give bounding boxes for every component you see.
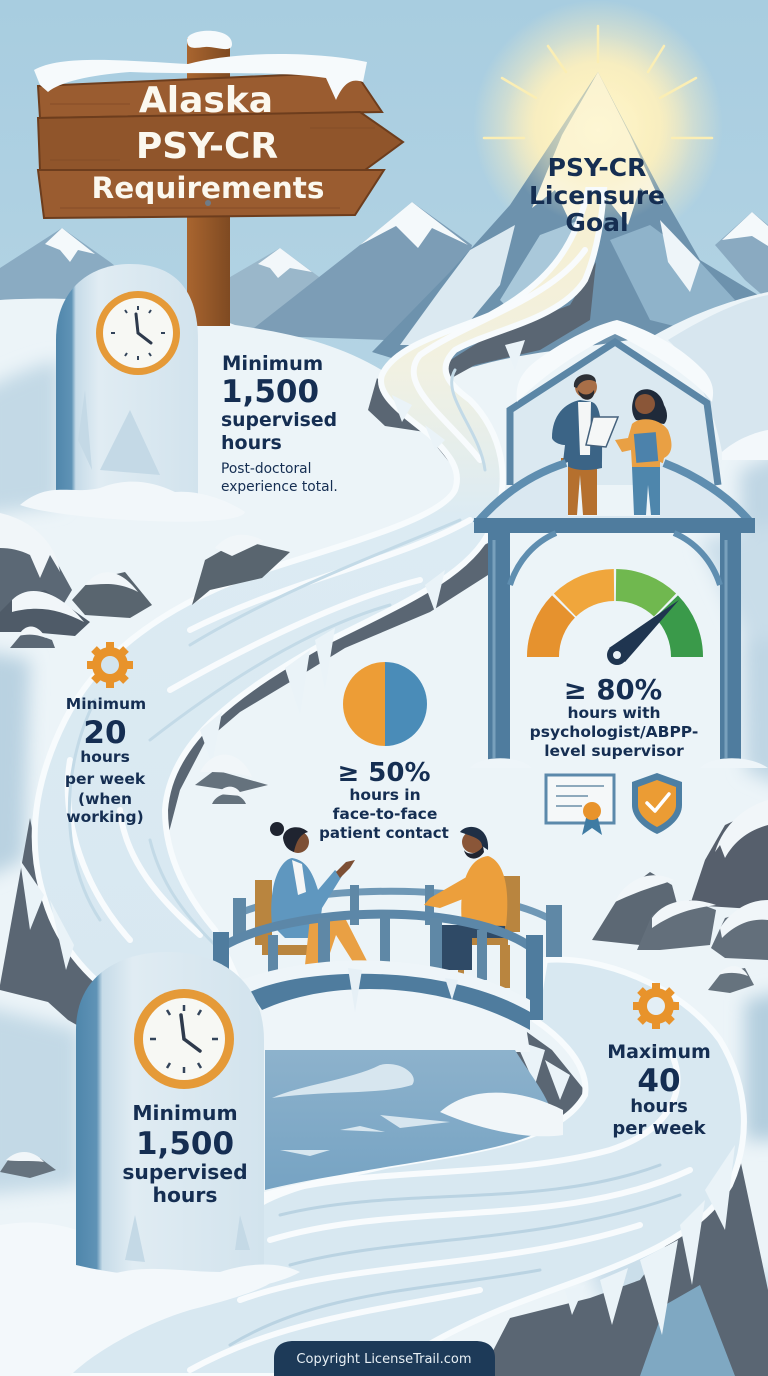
text: 80 percent: level supervisor bbox=[544, 742, 684, 760]
snow under bridge bbox=[262, 975, 530, 1052]
gauge amber segment bbox=[565, 585, 614, 605]
gauge bbox=[543, 585, 687, 657]
text: minimum 20 hours: working) bbox=[66, 808, 144, 826]
text: minimum 20 hours: (when bbox=[78, 790, 132, 808]
text: 50 percent: hours in bbox=[349, 786, 421, 804]
icy river upper bbox=[35, 190, 604, 1005]
text: minimum 20 hours: Minimum bbox=[66, 695, 146, 713]
icy river lower bbox=[60, 959, 744, 1376]
wooden sign board bbox=[38, 72, 403, 218]
person: colleague with folder bbox=[615, 389, 671, 515]
boulders left bbox=[0, 513, 290, 1178]
icon: sun rays bbox=[484, 26, 712, 138]
snow bank bottom left bbox=[0, 1222, 275, 1376]
milestone stone: top bbox=[20, 264, 245, 522]
snow roof bbox=[517, 320, 713, 402]
text: minimum 20 hours bbox=[65, 695, 146, 826]
text: minimum 1500 hours bottom: Minimum bbox=[132, 1101, 238, 1125]
text: 80 percent: ≥ 80% bbox=[564, 674, 662, 706]
back railing bbox=[235, 891, 552, 920]
text: maximum 40 hours: hours bbox=[630, 1096, 688, 1117]
icicles bbox=[20, 340, 735, 1335]
arch dome bbox=[510, 342, 718, 485]
text: minimum 20 hours: per week bbox=[65, 770, 146, 788]
gauge orange segment bbox=[543, 606, 564, 657]
text: minimum 1500 hours top: experience total. bbox=[221, 479, 338, 495]
snow on sign bbox=[34, 54, 367, 100]
text: 50 percent: ≥ 50% bbox=[337, 758, 431, 788]
text: 80 percent: psychologist/ABPP- bbox=[530, 723, 698, 741]
icon: gauge needle bbox=[607, 600, 679, 665]
goal label: Goal bbox=[565, 208, 629, 237]
goal label: Licensure bbox=[529, 181, 665, 210]
bridge deck arch bbox=[250, 974, 530, 1030]
text: 80 percent: hours with bbox=[567, 704, 661, 722]
bridge with two people bbox=[213, 822, 562, 1030]
rock inner blue ice bbox=[640, 1285, 735, 1376]
support posts bbox=[488, 533, 741, 760]
heading bbox=[92, 80, 324, 205]
text: minimum 1500 hours top: hours bbox=[221, 432, 282, 454]
text: minimum 1500 hours top: supervised bbox=[221, 410, 337, 431]
snowy balcony bbox=[480, 462, 750, 522]
text: 50 percent bbox=[319, 758, 449, 842]
text: maximum 40 hours bbox=[607, 1041, 711, 1139]
icon: certificate bbox=[546, 775, 614, 835]
signpost bbox=[34, 31, 403, 326]
heading: Alaska bbox=[139, 80, 273, 121]
icon: clock bbox=[96, 291, 180, 375]
heading: Requirements bbox=[92, 171, 324, 205]
arch shelter bbox=[470, 320, 768, 768]
person: seated man bbox=[424, 827, 520, 988]
bridge front railing bbox=[220, 914, 535, 950]
footer copyright pill: Copyright LicenseTrail.com bbox=[296, 1352, 472, 1367]
heading: PSY-CR bbox=[136, 126, 278, 167]
text: maximum 40 hours: Maximum bbox=[607, 1041, 711, 1063]
icon: shield check bbox=[632, 773, 682, 834]
text: minimum 1500 hours bottom: hours bbox=[153, 1183, 217, 1207]
text: maximum 40 hours: 40 bbox=[637, 1063, 681, 1099]
goal label: PSY-CR bbox=[548, 153, 646, 182]
icon: pie chart bbox=[343, 662, 427, 746]
text: 50 percent: patient contact bbox=[319, 824, 449, 842]
text: maximum 40 hours: per week bbox=[612, 1118, 707, 1139]
railing posts bbox=[268, 910, 487, 990]
icon: clock bbox=[134, 989, 234, 1089]
gauge dark green segment bbox=[666, 606, 687, 657]
frozen pool bbox=[265, 1050, 563, 1190]
icon: gear left bbox=[87, 642, 133, 688]
footer copyright pill bbox=[274, 1341, 495, 1376]
boulders right bbox=[592, 800, 768, 993]
gauge light green segment bbox=[616, 585, 665, 605]
text: minimum 1500 hours top: 1,500 bbox=[221, 374, 319, 410]
text: minimum 1500 hours bottom: supervised bbox=[122, 1160, 248, 1184]
text: 80 percent bbox=[530, 674, 698, 760]
person: seated woman bbox=[255, 822, 368, 985]
icon: gear right bbox=[633, 983, 679, 1029]
snow cap on pole bbox=[187, 31, 232, 49]
text: minimum 1500 hours top bbox=[221, 352, 338, 495]
snow hills bbox=[0, 292, 768, 1376]
summit mountain bbox=[372, 72, 758, 370]
sun glow behind summit bbox=[473, 0, 723, 250]
snow on deck bbox=[228, 960, 530, 1012]
text: minimum 1500 hours top: Post-doctoral bbox=[221, 461, 311, 477]
text: minimum 20 hours: hours bbox=[80, 748, 130, 766]
sun glow bbox=[503, 35, 693, 225]
text: 50 percent: face-to-face bbox=[333, 805, 437, 823]
signpost pole bbox=[187, 38, 230, 326]
text: minimum 1500 hours bottom bbox=[122, 1101, 248, 1207]
text: minimum 1500 hours bottom: 1,500 bbox=[136, 1126, 234, 1162]
text: minimum 1500 hours top: Minimum bbox=[222, 352, 323, 375]
bridge icicles bbox=[348, 968, 458, 1012]
goal label bbox=[529, 153, 665, 237]
distant mountains bbox=[0, 202, 768, 340]
person: supervisor with clipboard bbox=[552, 374, 618, 515]
milestone stone: bottom bbox=[76, 952, 300, 1292]
text: minimum 20 hours: 20 bbox=[83, 715, 127, 751]
